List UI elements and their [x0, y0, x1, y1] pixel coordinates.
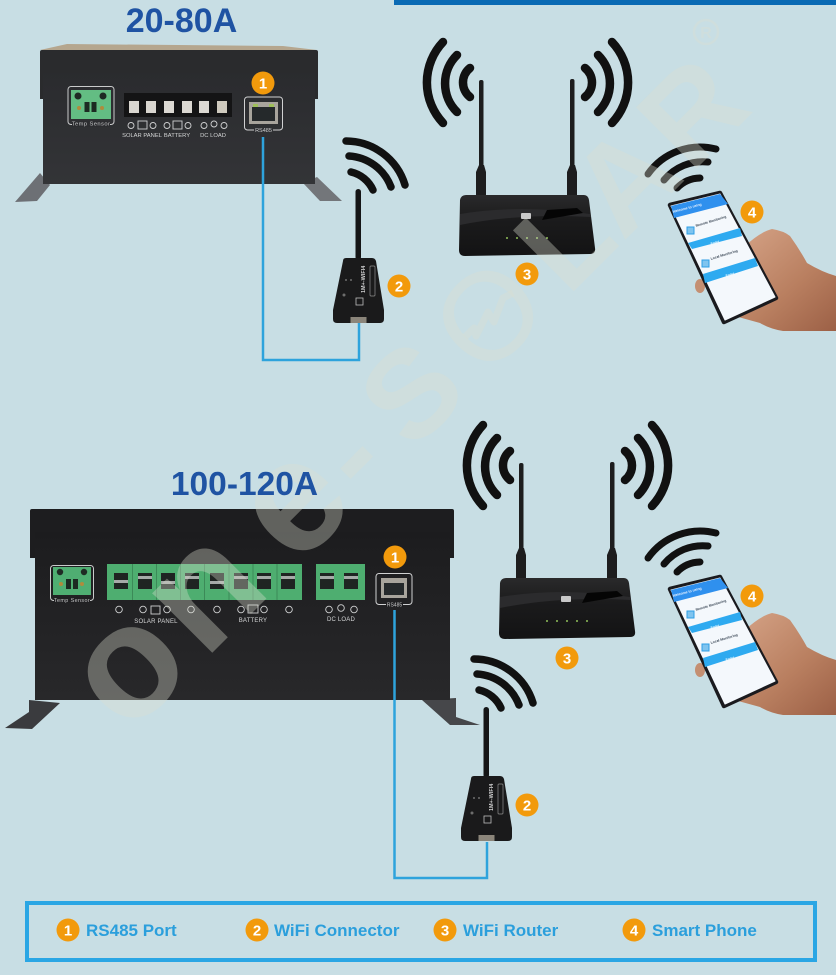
terminal labels: DC LOAD — [327, 617, 355, 623]
legend frame — [27, 903, 815, 960]
legend item: Smart Phone — [622, 918, 757, 942]
dongle label: 1M+-WIFI4 — [361, 265, 367, 293]
phone text — [672, 202, 738, 278]
badge 1 — [384, 546, 406, 568]
badge 4: 4 — [748, 204, 757, 222]
phone button two — [703, 258, 758, 283]
antennas — [516, 462, 617, 578]
panel: WiFi router top — [427, 42, 628, 256]
antennas — [476, 79, 577, 195]
panel: smart phone bottom — [648, 531, 836, 715]
legend item: WiFi Connector — [246, 918, 400, 942]
legend item: RS485 Port: RS485 Port — [86, 921, 177, 940]
wifi waves left — [467, 425, 510, 506]
dongle label strip — [498, 784, 503, 814]
badge 2 — [516, 794, 538, 816]
watermark wordmark: one-SOLAR — [25, 8, 779, 761]
badge 2: 2 — [395, 278, 403, 296]
controller lid top — [40, 44, 317, 50]
phone button two — [703, 642, 758, 667]
phone text: Welcome to using — [672, 202, 702, 214]
phone screen — [671, 194, 775, 320]
terminal labels — [134, 617, 355, 625]
phone text: Remote Monitoring — [695, 215, 727, 228]
terminal labels — [122, 133, 226, 139]
panel: WiFi connector top — [333, 141, 405, 323]
dongle QR mark — [356, 298, 363, 305]
finger behind phone — [695, 663, 705, 677]
phone screen — [671, 578, 775, 704]
RS485 port: RS485 — [255, 128, 272, 134]
wifi waves right — [625, 425, 668, 506]
heading: 100-120A: 100-120A — [171, 466, 318, 503]
dongle label strip — [370, 266, 375, 296]
antenna — [356, 189, 361, 260]
badge 3: 3 — [523, 266, 531, 284]
controller lid front — [40, 50, 318, 99]
temp sensor connector — [50, 566, 94, 604]
legend item: WiFi Connector: 2 — [253, 922, 261, 940]
dongle port — [478, 835, 494, 841]
phone text: Enter — [710, 623, 720, 630]
terminal labels: BATTERY — [164, 133, 190, 139]
legend item: Smart Phone: Smart Phone — [652, 921, 757, 940]
phone text: Local Monitoring — [710, 249, 738, 261]
terminal labels: BATTERY — [239, 618, 267, 624]
watermark registered mark — [694, 20, 718, 44]
controller body — [43, 70, 315, 184]
terminal labels: SOLAR PANEL — [122, 133, 163, 139]
solar and battery terminals — [107, 564, 302, 600]
badge 4 — [740, 584, 764, 608]
phone text: Enter — [725, 271, 735, 278]
panel: WiFi connector bottom — [461, 659, 533, 841]
wifi waves — [648, 531, 716, 572]
RS485 port — [376, 574, 412, 608]
dongle status dots — [470, 797, 480, 814]
terminal symbols — [128, 121, 227, 129]
phone text: Enter — [710, 239, 720, 246]
panel: 100-120A controller — [5, 509, 480, 729]
router glossy band — [460, 209, 591, 225]
badge 1 — [252, 72, 274, 94]
RS485 port: RS485 — [387, 602, 402, 608]
phone icons — [687, 611, 709, 651]
temp sensor connector: Temp Sensor — [72, 122, 110, 128]
badge 1: 1 — [391, 550, 399, 566]
badge 2: 2 — [523, 798, 531, 814]
wifi waves — [648, 147, 716, 188]
badge 3 — [556, 646, 578, 670]
top accent bar — [394, 0, 836, 5]
controller body — [35, 530, 450, 700]
phone text: Enter — [725, 655, 735, 662]
phone body — [670, 577, 776, 706]
phone header — [671, 194, 728, 218]
wifi waves — [346, 141, 405, 190]
right mounting foot — [303, 177, 342, 201]
DC load terminals — [316, 564, 365, 600]
router LEDs — [546, 620, 588, 622]
left mounting foot — [5, 700, 60, 729]
router window — [542, 208, 583, 220]
wifi waves right — [585, 42, 628, 123]
phone text: Remote Monitoring — [695, 599, 727, 612]
wifi waves — [474, 659, 533, 708]
RS485 port — [244, 97, 282, 134]
right mounting foot — [422, 698, 480, 725]
badge 4 — [740, 200, 764, 224]
watermark registered mark: R — [700, 25, 712, 42]
panel: smart phone top — [648, 147, 836, 331]
router logo — [561, 596, 571, 602]
watermark wave in the O — [465, 293, 513, 337]
finger behind phone — [695, 279, 705, 293]
phone button one — [688, 612, 742, 633]
terminal symbols — [116, 605, 357, 614]
phone text: Local Monitoring — [710, 633, 738, 645]
phone body — [670, 193, 776, 322]
badge 2 — [388, 274, 410, 298]
legend item: WiFi Router — [434, 918, 559, 942]
badge 4: 4 — [748, 588, 757, 606]
controller lid front — [30, 509, 454, 558]
legend item: RS485 Port — [56, 918, 177, 942]
phone button one — [688, 228, 742, 249]
cable: 20-80A controller to WiFi connector — [263, 137, 359, 360]
legend item: RS485 Port: 1 — [64, 922, 72, 940]
terminal block — [124, 93, 232, 117]
temp sensor connector: Temp Sensor — [54, 598, 90, 604]
router body — [499, 578, 635, 639]
left mounting foot — [15, 173, 50, 202]
phone text — [672, 586, 738, 662]
router body — [459, 195, 595, 256]
dongle port — [350, 317, 366, 323]
dongle status dots — [342, 279, 352, 296]
temp sensor connector — [68, 86, 114, 128]
dongle QR mark — [484, 816, 491, 823]
router LEDs — [506, 237, 548, 239]
cable: 100-120A controller to WiFi connector — [394, 610, 487, 878]
router glossy band — [500, 592, 631, 608]
router logo — [521, 213, 531, 219]
wifi waves left — [427, 42, 470, 123]
phone header — [671, 578, 728, 602]
phone text: Welcome to using — [672, 586, 702, 598]
legend item: WiFi Connector: WiFi Connector — [274, 921, 400, 940]
legend item: WiFi Router: 3 — [441, 922, 449, 940]
terminal labels: DC LOAD — [200, 133, 226, 139]
watermark — [25, 8, 779, 761]
phone icons — [687, 227, 709, 267]
hand — [720, 613, 836, 715]
panel: 20-80A controller — [15, 44, 342, 202]
hand — [720, 229, 836, 331]
antenna — [484, 707, 489, 778]
legend item: WiFi Router: WiFi Router — [463, 921, 559, 940]
legend item: Smart Phone: 4 — [630, 922, 639, 940]
panel: WiFi router bottom — [467, 425, 668, 639]
heading: 20-80A: 20-80A — [126, 2, 237, 40]
dongle body — [333, 258, 384, 323]
dongle label: 1M+-WIFI4 — [489, 783, 495, 811]
legend panel — [27, 903, 815, 960]
dongle body — [461, 776, 512, 841]
terminal labels: SOLAR PANEL — [134, 619, 178, 625]
badge 1: 1 — [259, 76, 267, 92]
badge 3: 3 — [563, 650, 571, 668]
badge 3 — [516, 262, 538, 286]
router window — [582, 591, 623, 603]
